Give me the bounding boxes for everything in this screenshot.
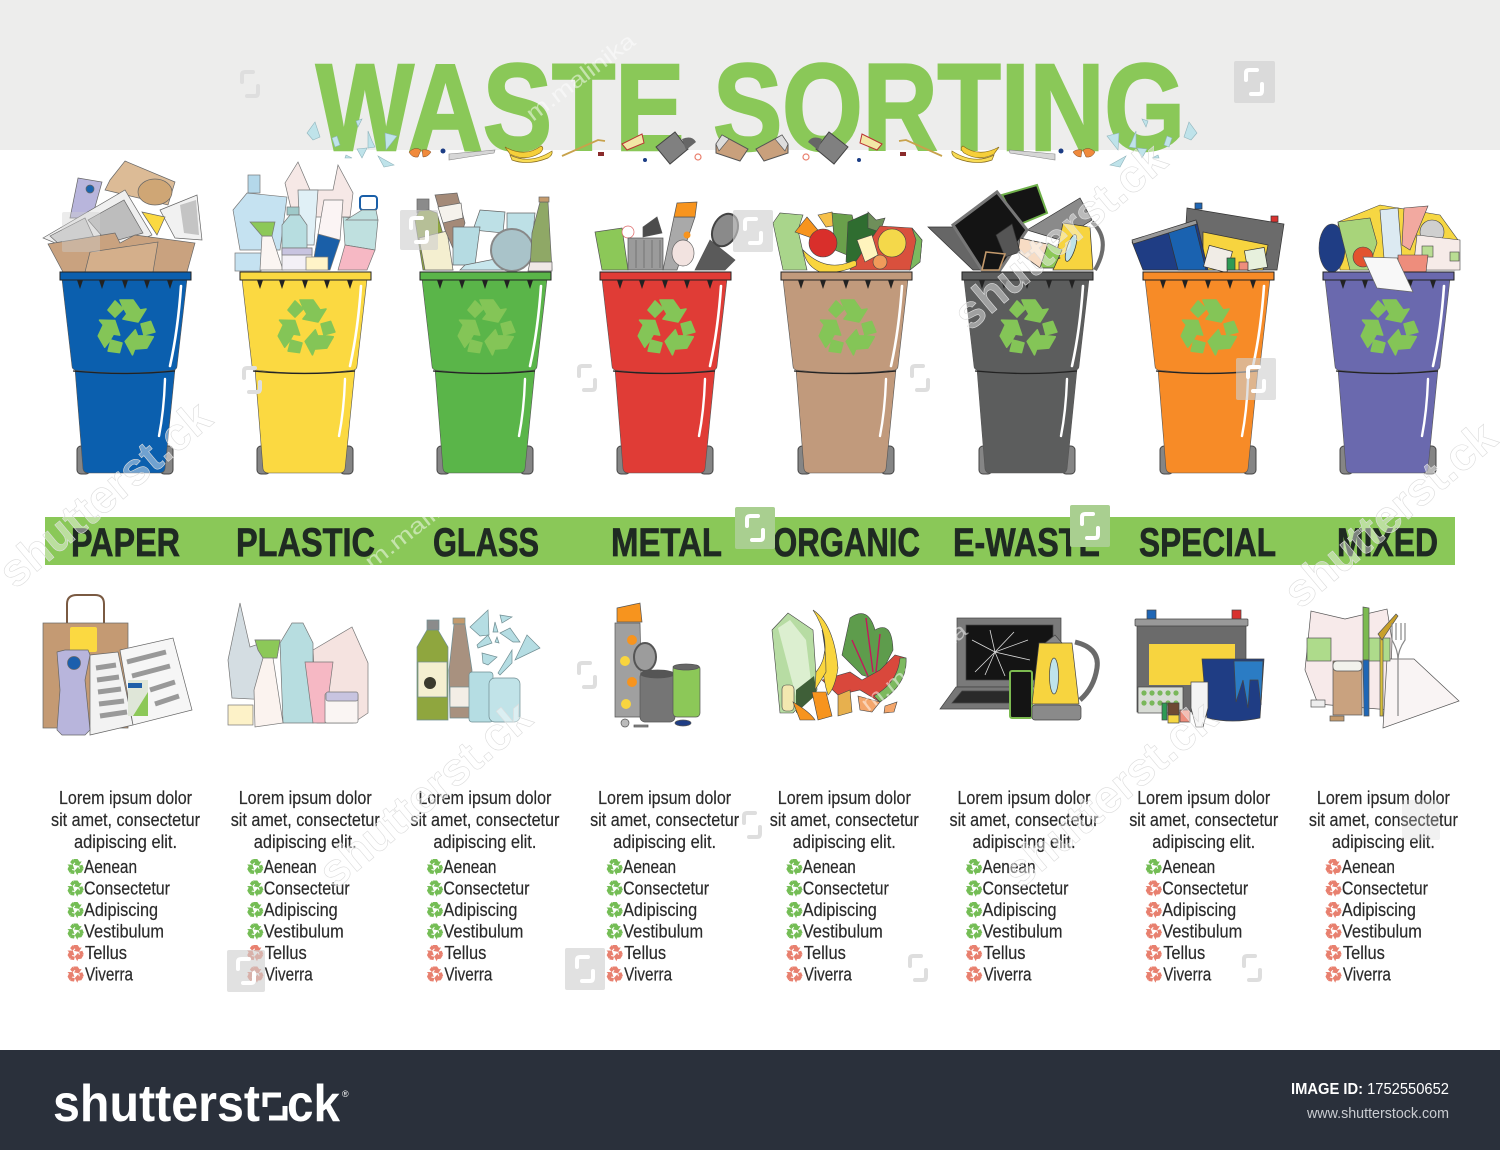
debris row left [307, 119, 748, 167]
label: glass: GLASS [433, 521, 539, 565]
label: special: SPECIAL [1139, 521, 1276, 565]
list: metal: Vestibulum [623, 922, 703, 942]
e-waste bin body [962, 272, 1093, 474]
text column: plastic: adipiscing elit. [254, 832, 357, 852]
watermark overlay: shutterst.ck [993, 690, 1226, 898]
paper contents [43, 161, 202, 272]
list: glass: Adipiscing [443, 900, 517, 920]
list: paper: Consectetur [84, 878, 170, 898]
list: special [1144, 857, 1248, 984]
list: e-waste [965, 857, 1068, 984]
bin: e-waste [928, 185, 1103, 474]
special contents [1132, 203, 1284, 273]
list: mixed [1324, 857, 1428, 984]
footer logo: ck [287, 1075, 340, 1133]
text column: e-waste: sit amet, consectetur [950, 810, 1098, 830]
list: e-waste: Consectetur [982, 878, 1068, 898]
bin: metal [595, 202, 743, 474]
list: organic: Adipiscing [803, 900, 877, 920]
title: WASTE SORTING [316, 40, 1185, 177]
illustration: metal items [615, 603, 700, 727]
footer logo: ® [342, 1089, 349, 1099]
list: organic: Consectetur [803, 878, 889, 898]
text column: organic [770, 788, 919, 984]
list: organic: Aenean [803, 857, 856, 877]
list: plastic: Aenean [264, 857, 317, 877]
list: plastic: Tellus [265, 943, 307, 963]
text column: paper: Lorem ipsum dolor [59, 788, 192, 808]
list: mixed: Viverra [1343, 964, 1392, 984]
text column: e-waste: Lorem ipsum dolor [958, 788, 1091, 808]
list: metal: Consectetur [623, 878, 709, 898]
list: e-waste: Vestibulum [982, 922, 1062, 942]
metal contents [595, 202, 743, 270]
list: metal: Aenean [623, 857, 676, 877]
list: paper: Adipiscing [84, 900, 158, 920]
list: e-waste: Viverra [984, 964, 1032, 984]
list: organic [785, 857, 889, 984]
metal bin body [600, 272, 731, 474]
list: metal: Tellus [624, 943, 666, 963]
illustration: organic items [772, 610, 906, 720]
list: paper: Tellus [85, 943, 127, 963]
bin: paper [43, 161, 202, 474]
text column: paper: adipiscing elit. [74, 832, 177, 852]
illustration: mixed items [1305, 607, 1459, 728]
text column: plastic: Lorem ipsum dolor [239, 788, 372, 808]
plastic contents [233, 162, 378, 271]
text column: special: sit amet, consectetur [1129, 810, 1278, 830]
list: organic: Tellus [804, 943, 846, 963]
watermark overlay: shutterst.ck [943, 132, 1176, 340]
text column: mixed: Lorem ipsum dolor [1317, 788, 1450, 808]
bin: special [1132, 203, 1284, 474]
list: mixed: Consectetur [1342, 878, 1428, 898]
text column: mixed: adipiscing elit. [1332, 832, 1435, 852]
bin: organic [773, 212, 922, 474]
list: special: Vestibulum [1162, 922, 1242, 942]
special bin body [1143, 272, 1274, 474]
text column: metal: adipiscing elit. [613, 832, 716, 852]
list: paper: Viverra [85, 964, 134, 984]
mixed bin body [1323, 272, 1454, 474]
list: special: Viverra [1163, 964, 1212, 984]
plastic bin body [240, 272, 371, 474]
footer logo: shutterst [53, 1075, 260, 1133]
list: special: Adipiscing [1162, 900, 1236, 920]
label: organic: ORGANIC [773, 521, 920, 565]
list: plastic [246, 857, 350, 984]
text column: organic: adipiscing elit. [793, 832, 896, 852]
text column: paper: sit amet, consectetur [51, 810, 200, 830]
list: glass: Viverra [444, 964, 493, 984]
list: mixed: Tellus [1343, 943, 1385, 963]
text column: paper [51, 788, 200, 984]
list: glass: Aenean [443, 857, 496, 877]
list: paper: Aenean [84, 857, 137, 877]
list: plastic: Consectetur [264, 878, 350, 898]
watermark overlay: m.malinika [360, 471, 481, 574]
text column: organic: sit amet, consectetur [770, 810, 919, 830]
watermark overlay: shutterst.ck [1273, 410, 1500, 618]
text column: special: adipiscing elit. [1152, 832, 1255, 852]
text column: metal: Lorem ipsum dolor [598, 788, 731, 808]
illustration: e-waste items [940, 618, 1097, 720]
label: e-waste: E-WASTE [953, 521, 1100, 565]
list: metal: Viverra [624, 964, 673, 984]
e-waste contents [928, 185, 1103, 270]
text column: metal [590, 788, 739, 984]
glass contents [415, 193, 552, 271]
text column: glass: sit amet, consectetur [410, 810, 559, 830]
list: metal: Adipiscing [623, 900, 697, 920]
site url: www.shutterstock.com [1306, 1105, 1449, 1122]
footer bar [0, 1050, 1500, 1150]
text column: plastic: sit amet, consectetur [231, 810, 380, 830]
list: special: Consectetur [1162, 878, 1248, 898]
illustration: paper items [43, 595, 192, 735]
background: top band [0, 0, 1500, 150]
label: mixed: MIXED [1337, 521, 1438, 565]
list: plastic: Adipiscing [264, 900, 338, 920]
label: metal: METAL [611, 521, 722, 565]
list: organic: Vestibulum [803, 922, 883, 942]
image id: IMAGE ID: 1752550652 [1291, 1081, 1449, 1098]
watermark overlay: shutterst.ck [308, 690, 541, 898]
list: mixed: Vestibulum [1342, 922, 1422, 942]
list: plastic: Viverra [265, 964, 314, 984]
green label band [45, 517, 1455, 565]
text column: mixed [1309, 788, 1458, 984]
list: mixed: Adipiscing [1342, 900, 1416, 920]
illustration: glass items [417, 610, 540, 722]
list: plastic: Vestibulum [264, 922, 344, 942]
list: e-waste: Tellus [984, 943, 1026, 963]
list: glass: Vestibulum [443, 922, 523, 942]
watermark overlay: m.malinika [521, 27, 641, 126]
glass bin body [420, 272, 551, 474]
list: glass: Tellus [444, 943, 486, 963]
bin: plastic [233, 162, 378, 474]
bin: mixed [1319, 205, 1460, 474]
list: paper [66, 857, 170, 984]
list: organic: Viverra [804, 964, 853, 984]
mixed contents [1319, 205, 1460, 272]
text column: glass: Lorem ipsum dolor [418, 788, 551, 808]
text column: special [1129, 788, 1278, 984]
text column: mixed: sit amet, consectetur [1309, 810, 1458, 830]
list: glass: Consectetur [443, 878, 529, 898]
list: glass [426, 857, 529, 984]
organic contents [773, 212, 922, 272]
list: paper: Vestibulum [84, 922, 164, 942]
illustration: special items [1135, 610, 1264, 727]
illustration: plastic items [228, 603, 368, 727]
list: e-waste: Adipiscing [982, 900, 1056, 920]
debris row right [756, 119, 1197, 167]
bin: glass [415, 193, 552, 474]
list: mixed: Aenean [1342, 857, 1395, 877]
list: metal [605, 857, 709, 984]
paper bin body [60, 272, 191, 474]
label: plastic: PLASTIC [236, 521, 375, 565]
list: e-waste: Aenean [982, 857, 1036, 877]
label: paper: PAPER [71, 521, 180, 565]
text column: glass: adipiscing elit. [433, 832, 536, 852]
organic bin body [781, 272, 912, 474]
text column: e-waste: adipiscing elit. [972, 832, 1076, 852]
text column: glass [410, 788, 559, 984]
text column: e-waste [950, 788, 1098, 984]
watermark overlay: m.malinika [856, 617, 973, 716]
text column: plastic [231, 788, 380, 984]
list: special: Tellus [1163, 943, 1205, 963]
text column: organic: Lorem ipsum dolor [778, 788, 911, 808]
text column: metal: sit amet, consectetur [590, 810, 739, 830]
white rag [1363, 257, 1413, 292]
list: special: Aenean [1162, 857, 1215, 877]
text column: special: Lorem ipsum dolor [1137, 788, 1270, 808]
